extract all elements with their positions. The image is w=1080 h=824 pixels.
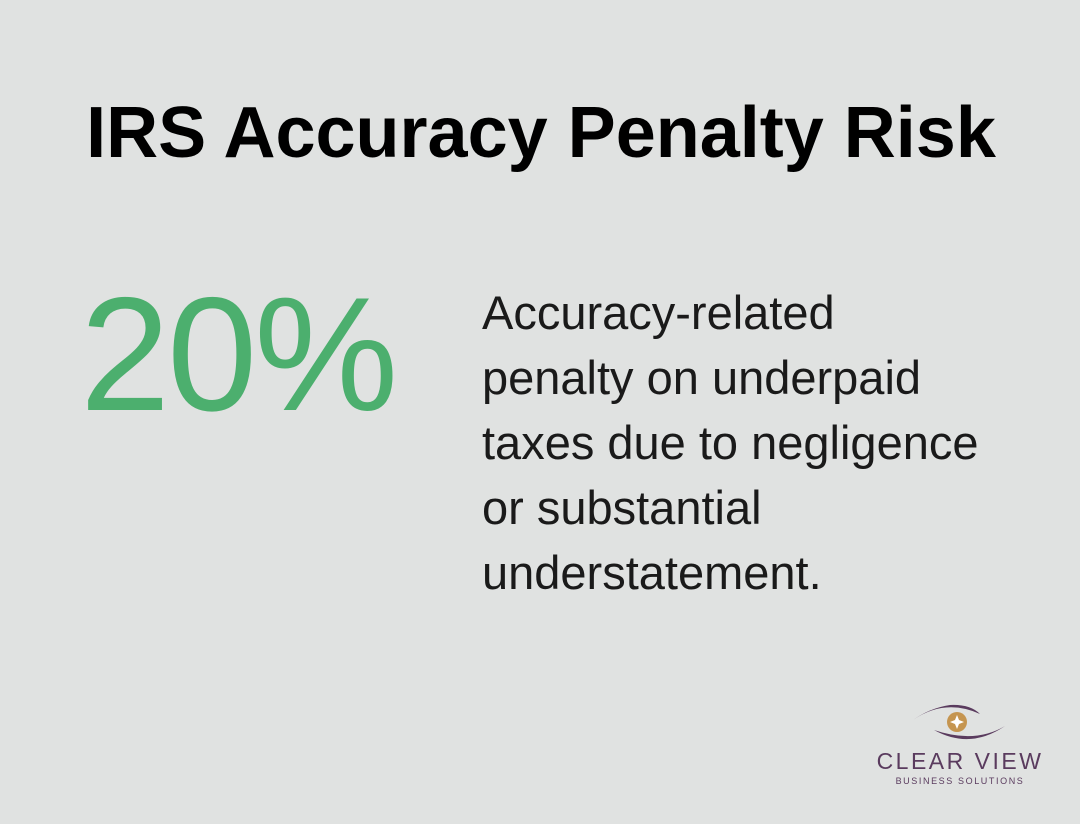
description text: penalty on underpaid <box>482 351 921 404</box>
description text: taxes due to negligence <box>482 416 978 469</box>
description text: or substantial <box>482 481 762 534</box>
logo: Clear View Business Solutions <box>877 704 1043 786</box>
description text <box>482 286 978 599</box>
logo text: CLEAR VIEW <box>877 748 1043 774</box>
title: IRS Accuracy Penalty Risk <box>86 93 996 173</box>
icon: eye <box>914 704 1005 740</box>
logo: Clear View Business Solutions: BUSINESS SOLUTIONS <box>896 776 1024 786</box>
description text: Accuracy-related <box>482 286 835 339</box>
statistic: 20%: 20% <box>80 264 395 445</box>
description text: understatement. <box>482 546 822 599</box>
